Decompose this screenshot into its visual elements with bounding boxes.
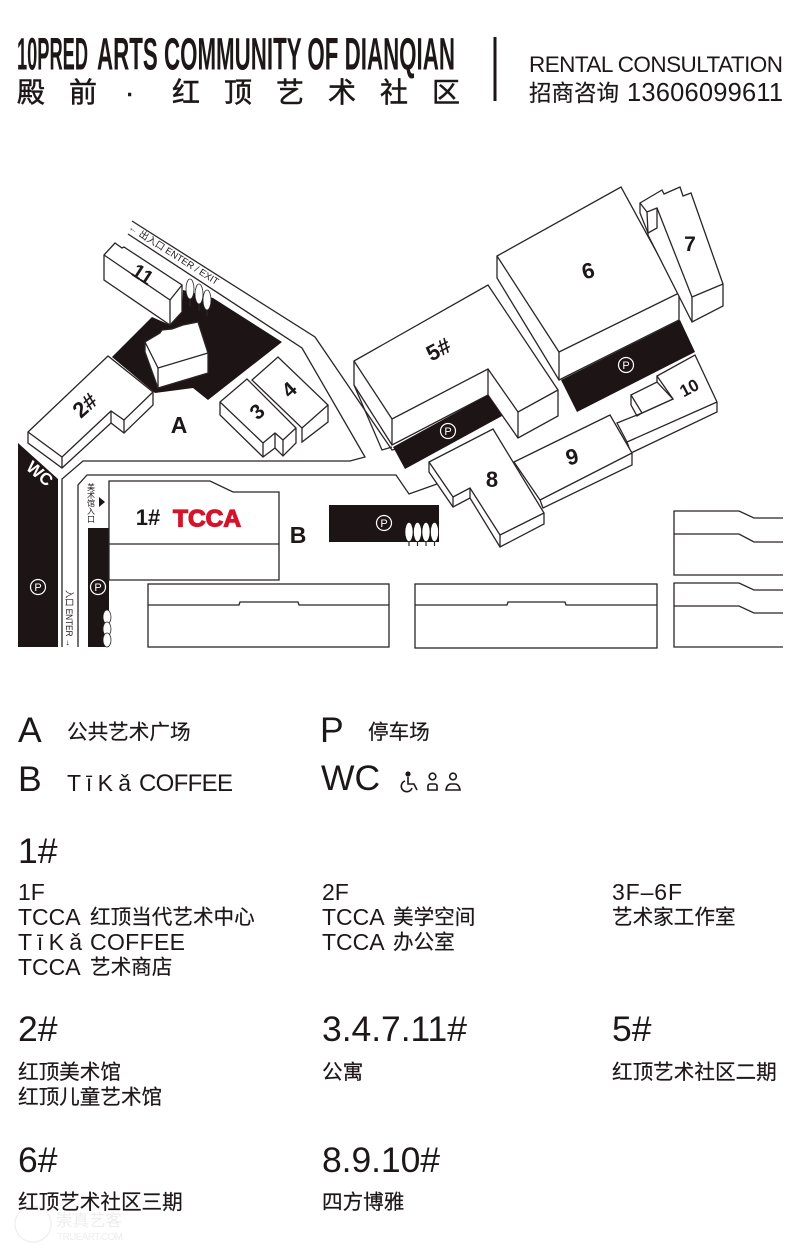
section: 8.9.10#: 四方博雅 bbox=[322, 1191, 404, 1214]
parking: building 6 bbox=[561, 320, 695, 412]
label: area B: B bbox=[290, 522, 306, 548]
WC and parking strip: P bbox=[34, 582, 42, 594]
parking with trees: centre: P bbox=[380, 518, 388, 530]
title: English name: ARTS COMMUNITY OF DIANQIAN bbox=[97, 28, 455, 80]
contact block: RENTAL CONSULTATION bbox=[529, 52, 783, 77]
trees near building 11 bbox=[186, 279, 211, 316]
label: enter exit road: ← 出入口 ENTER / EXIT bbox=[126, 221, 221, 288]
building 7 bbox=[640, 187, 723, 322]
contact block: 招商咨询 bbox=[529, 81, 619, 106]
parking strip beside building 1 bbox=[88, 528, 111, 647]
1F list: 艺术商店 bbox=[90, 956, 172, 979]
section: building 1#: 1# bbox=[18, 831, 58, 871]
section: 2# bbox=[18, 1009, 162, 1109]
label: museum entrance: 美 bbox=[87, 482, 95, 492]
building 2#: 2# bbox=[68, 388, 102, 423]
right blocks bbox=[674, 511, 783, 647]
map bbox=[18, 187, 783, 648]
section: 6#: 6# bbox=[18, 1140, 58, 1180]
section: 3.4.7.11#: 3.4.7.11# bbox=[322, 1009, 467, 1049]
legend: WC bbox=[321, 758, 460, 798]
building 10: 10 bbox=[677, 375, 702, 401]
building 4: 4 bbox=[278, 378, 302, 403]
icon: person wide bbox=[446, 773, 460, 790]
1F list: TCCA bbox=[18, 904, 81, 930]
section: 2#: 2# bbox=[18, 1009, 58, 1049]
1F list: 红顶当代艺术中心 bbox=[90, 906, 255, 929]
label: museum entrance: 口 bbox=[87, 515, 95, 524]
2F list: 美学空间 bbox=[393, 906, 475, 929]
2F list: 办公室 bbox=[393, 931, 455, 954]
roads bbox=[62, 221, 437, 647]
label: museum entrance: 术 bbox=[87, 490, 95, 500]
parking: building 5: P bbox=[444, 426, 452, 438]
title: English name: 10PRED bbox=[17, 28, 88, 80]
3F-6F list: 艺术家工作室 bbox=[612, 906, 736, 929]
legend: B: COFFEE bbox=[139, 770, 233, 797]
icon: person bbox=[428, 773, 437, 790]
legend: B bbox=[18, 759, 233, 799]
watermark bbox=[15, 1206, 123, 1243]
section: 3.4.7.11#: 公寓 bbox=[322, 1061, 363, 1084]
building 5# bbox=[354, 285, 558, 445]
building 4 bbox=[252, 357, 328, 442]
plaza A black ground bbox=[112, 290, 282, 400]
WC and parking strip: WC bbox=[23, 457, 56, 490]
building 9 bbox=[514, 415, 632, 508]
contact block: 13606099611 bbox=[627, 79, 783, 107]
building 5#: 5# bbox=[422, 333, 455, 366]
title: Chinese name: 殿前·红顶艺术社区 bbox=[17, 77, 460, 108]
section: 2#: 红顶美术馆 bbox=[18, 1061, 121, 1084]
parking: building 5 bbox=[393, 395, 502, 469]
label: museum entrance bbox=[87, 482, 105, 524]
section: 5#: 5# bbox=[612, 1009, 652, 1049]
lower block left bbox=[148, 584, 389, 647]
central building on plaza bbox=[145, 322, 208, 388]
building 2# bbox=[28, 356, 153, 468]
1F list: 1F bbox=[18, 879, 45, 905]
legend: A: A bbox=[18, 710, 42, 750]
building 11 bbox=[104, 243, 182, 325]
section: 6# bbox=[18, 1140, 183, 1214]
building 7: 7 bbox=[684, 233, 696, 256]
parking: building 6: P bbox=[622, 360, 630, 372]
legend: B: B bbox=[18, 759, 42, 799]
header divider bbox=[494, 37, 496, 101]
1F list: TCCA bbox=[18, 954, 81, 980]
building 1#: 1# bbox=[136, 505, 160, 530]
section: 3.4.7.11# bbox=[322, 1009, 467, 1084]
2F list: TCCA bbox=[322, 904, 385, 930]
building 8: 8 bbox=[486, 467, 498, 492]
1F list: T ī K ǎ bbox=[18, 929, 82, 955]
icon: wheelchair bbox=[401, 772, 417, 792]
2F list bbox=[322, 879, 475, 955]
legend: P: P bbox=[320, 710, 344, 750]
section: 8.9.10#: 8.9.10# bbox=[322, 1140, 440, 1180]
legend: P bbox=[320, 710, 430, 750]
building 3 bbox=[220, 379, 296, 457]
section: 5# bbox=[612, 1009, 777, 1084]
label: plaza A: A bbox=[171, 412, 187, 438]
legend: A bbox=[18, 710, 191, 750]
legend: P: 停车场 bbox=[368, 721, 430, 744]
section: 2#: 红顶儿童艺术馆 bbox=[18, 1086, 162, 1109]
building 8 bbox=[429, 429, 544, 547]
building 6 bbox=[497, 187, 679, 380]
watermark: TRUEART.COM bbox=[57, 1232, 123, 1243]
label: enter road: 入口 ENTER → bbox=[63, 590, 74, 647]
lower block middle bbox=[415, 584, 657, 648]
WC and parking strip bbox=[18, 443, 58, 647]
legend: A: 公共艺术广场 bbox=[67, 721, 191, 744]
contact block bbox=[529, 52, 783, 107]
legend: B: T ī K ǎ bbox=[67, 770, 131, 796]
building 10 bbox=[617, 355, 717, 453]
title: English name bbox=[17, 28, 455, 80]
3F-6F list: 3F–6F bbox=[612, 879, 682, 905]
parking strip beside building 1: P bbox=[94, 582, 102, 594]
building 3: 3 bbox=[246, 400, 270, 425]
2F list: 2F bbox=[322, 879, 349, 905]
section: building 1# bbox=[18, 831, 736, 980]
label: museum entrance: 入 bbox=[87, 507, 95, 516]
watermark: 崇真艺客 bbox=[56, 1211, 122, 1230]
section: 5#: 红顶艺术社区二期 bbox=[612, 1061, 777, 1084]
1F list bbox=[18, 879, 255, 980]
building 11: 11 bbox=[127, 260, 157, 290]
building 1# bbox=[109, 481, 279, 580]
TCCA logo: TCCA bbox=[173, 506, 241, 532]
legend: WC: WC bbox=[321, 758, 380, 798]
section: 8.9.10# bbox=[322, 1140, 440, 1214]
building 6: 6 bbox=[579, 257, 597, 284]
label: museum entrance: 馆 bbox=[87, 498, 95, 508]
header: title block bbox=[17, 28, 460, 108]
parking with trees: centre bbox=[329, 505, 439, 546]
3F-6F list bbox=[612, 879, 736, 929]
2F list: TCCA bbox=[322, 929, 385, 955]
section: 6#: 红顶艺术社区三期 bbox=[18, 1191, 183, 1214]
1F list: COFFEE bbox=[90, 929, 185, 955]
building 9: 9 bbox=[563, 443, 581, 470]
